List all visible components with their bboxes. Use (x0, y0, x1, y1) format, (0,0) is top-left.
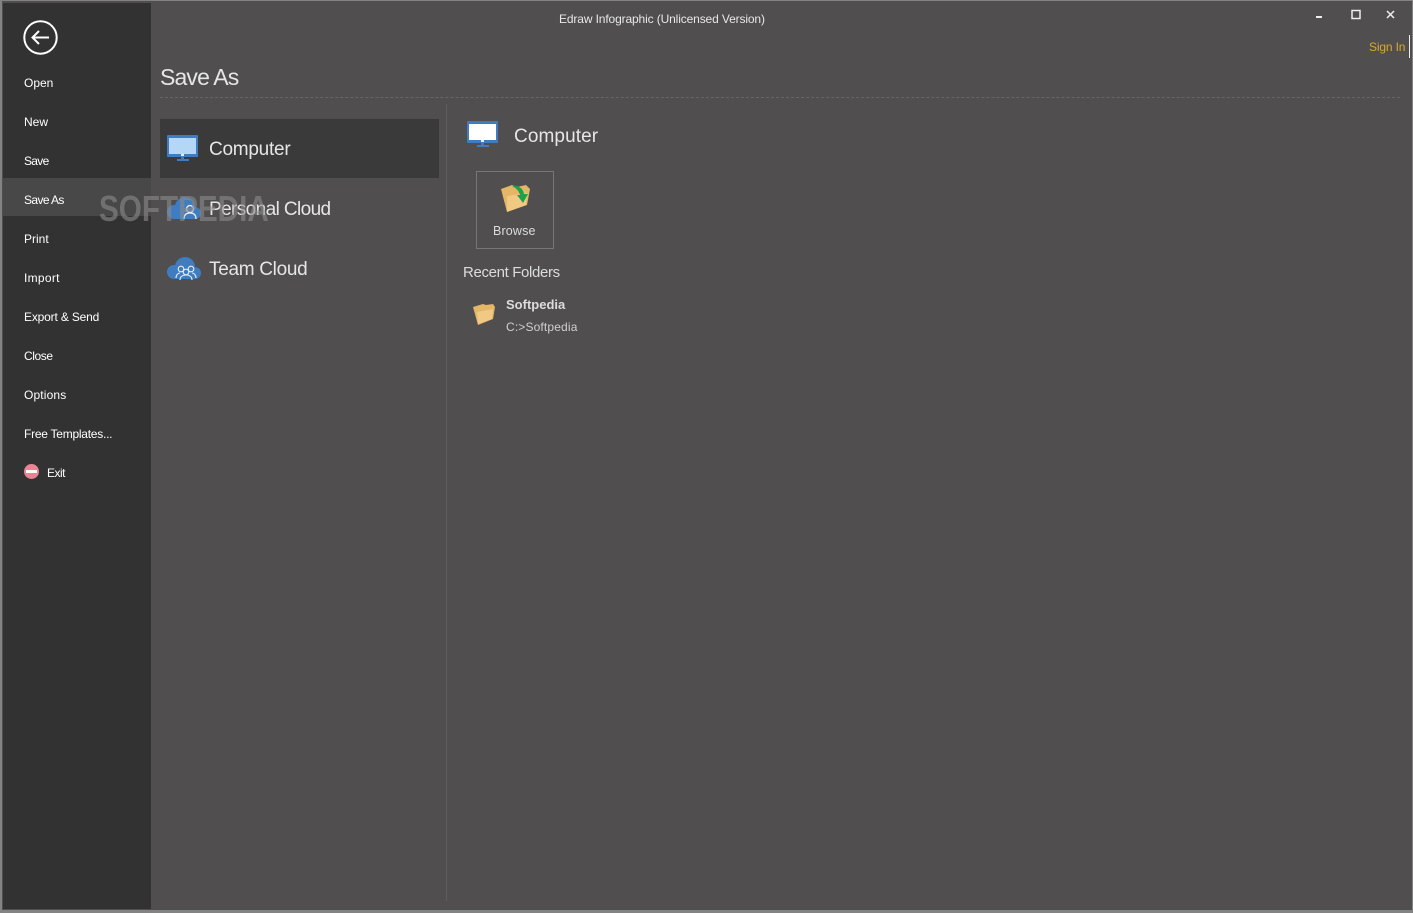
icon: computer header (467, 121, 498, 147)
icon: computer (167, 135, 198, 161)
browse button (476, 171, 554, 249)
icon: exit (24, 464, 39, 479)
watermark: SOFTPEDIA (99, 188, 269, 229)
window controls (1316, 10, 1394, 20)
folder name: Softpedia (506, 297, 565, 312)
highlighted menu row: Save As (3, 178, 151, 216)
label: Team Cloud: Team Cloud (209, 259, 307, 280)
icon: back arrow (23, 20, 58, 55)
section heading: Computer: Computer (514, 126, 598, 147)
icon: recent folder (473, 304, 495, 325)
folder path: C:>Softpedia (506, 320, 578, 334)
selected location background (160, 119, 439, 178)
menu item: Exit: Exit (47, 466, 65, 480)
menu item: Close: Close (24, 349, 53, 363)
page heading: Save As (160, 64, 238, 90)
menu item: Options: Options (24, 388, 66, 402)
panel: locations list (160, 119, 439, 280)
icon: browse folder (501, 185, 530, 212)
panel: sidebar menu (3, 3, 151, 909)
window title: Edraw Infographic (Unlicensed Version) (559, 12, 765, 26)
icon: team cloud (167, 257, 201, 280)
label: Personal Cloud: Personal Cloud (209, 199, 331, 220)
icon: personal cloud (167, 197, 201, 219)
menu item: Free Templates: Free Templates... (24, 427, 112, 441)
menu item: Save As: Save As (24, 193, 64, 207)
menu item: Print: Print (24, 232, 49, 246)
menu item: Import: Import (24, 271, 60, 285)
heading: Recent Folders: Recent Folders (463, 264, 560, 281)
label: Computer: Computer (209, 139, 290, 160)
menu item: Export & Send: Export & Send (24, 310, 99, 324)
recent folder entry (473, 297, 578, 334)
menu item: New: New (24, 115, 48, 129)
sign in link: Sign In (1369, 40, 1405, 54)
menu item: Save: Save (24, 154, 49, 168)
label: Browse: Browse (493, 224, 536, 238)
menu item: Open: Open (24, 76, 53, 90)
sign in caret (1409, 35, 1410, 58)
